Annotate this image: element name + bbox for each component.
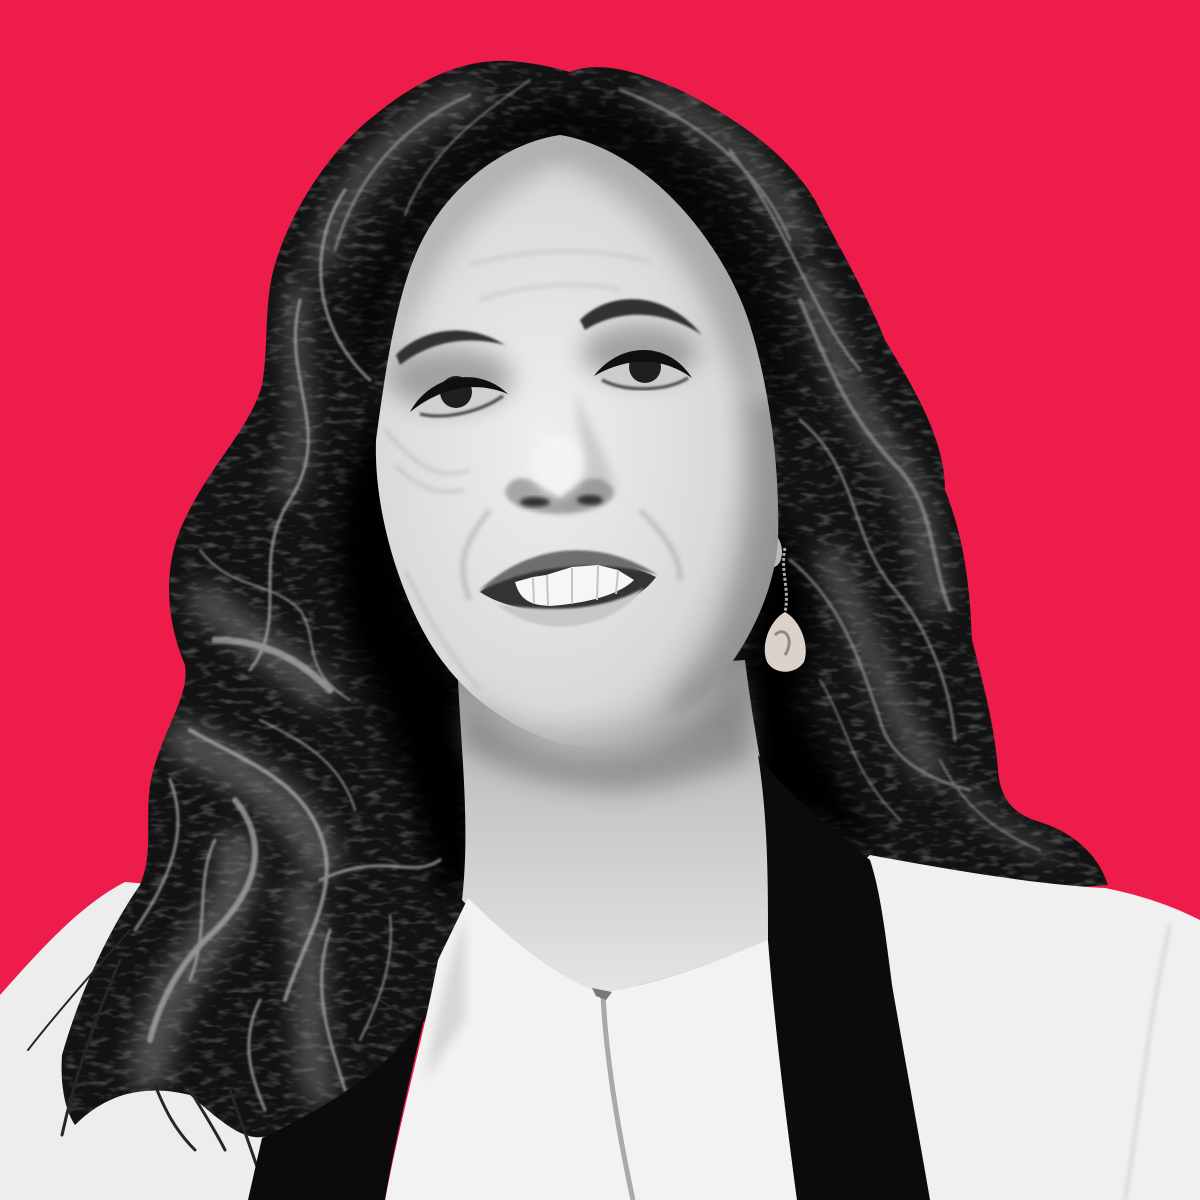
hair: broad grey waves <box>150 95 1050 1090</box>
mouth <box>478 550 658 627</box>
blouse collar button <box>592 988 612 1000</box>
hair: highlight strands right and crown <box>335 80 1040 850</box>
forehead shadow from hair <box>387 135 765 400</box>
hair: tonal waves and texture <box>62 61 1108 1136</box>
face <box>376 135 778 746</box>
nose shadow <box>572 404 616 514</box>
eyebrow right <box>580 299 702 335</box>
ear <box>762 530 782 568</box>
jacket: left shoulder <box>0 882 320 1200</box>
earring <box>765 548 806 672</box>
nose <box>505 435 614 514</box>
eye socket shadows <box>388 348 512 408</box>
face shading <box>378 125 800 780</box>
neck shadow <box>462 680 752 791</box>
blouse placket <box>603 994 633 1200</box>
smile line <box>463 510 680 600</box>
eye left <box>410 376 508 416</box>
hair: highlight strands left <box>135 190 440 1110</box>
jacket: right shoulder seam <box>1125 925 1170 1200</box>
eye right <box>594 350 692 389</box>
jacket: right shoulder <box>840 855 1200 1200</box>
hair: main silhouette <box>62 61 1108 1137</box>
right cheek shadow <box>661 392 778 716</box>
eyebrow left <box>396 331 505 365</box>
lapel: left black <box>248 1015 425 1200</box>
left cheek wrinkles <box>385 430 480 690</box>
hair: dark core near face <box>336 100 880 900</box>
blouse shadow <box>425 915 465 1080</box>
neck <box>458 660 770 992</box>
hair: fine streak texture <box>62 61 1108 1136</box>
forehead lines <box>470 251 650 300</box>
hair: wispy left ends <box>28 930 470 1170</box>
chin shadow <box>476 696 688 746</box>
lapel: right black <box>758 755 930 1200</box>
blouse <box>385 898 797 1200</box>
